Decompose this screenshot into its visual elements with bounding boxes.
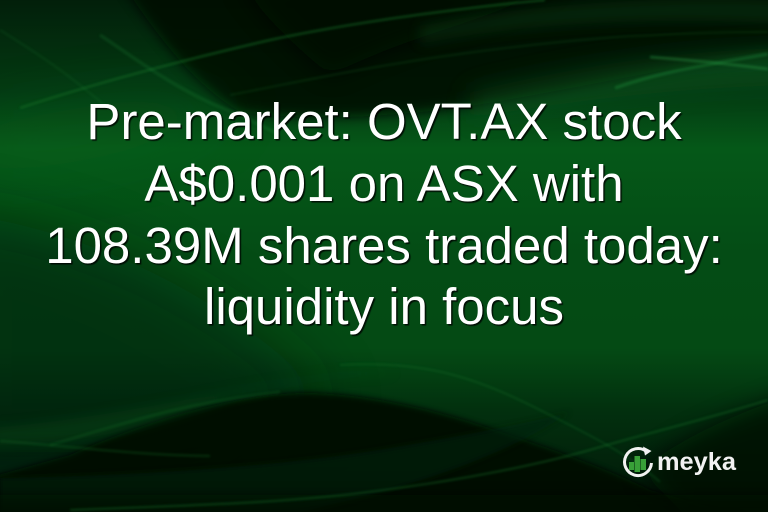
logo: meyka [623, 446, 737, 478]
left lower darkening [0, 210, 330, 480]
left light glow [0, 97, 240, 175]
bottom dark mound [0, 393, 768, 512]
top dark swoosh [120, 0, 768, 117]
bottom glows and streaks [0, 372, 400, 445]
streaks [0, 0, 768, 135]
title: 108.39M shares traded today: [45, 217, 723, 274]
icon: ring with bars [625, 446, 652, 476]
title: Pre-market: OVT.AX stock [86, 93, 682, 150]
wordmark: meyka [657, 448, 737, 476]
top-right glow band [420, 0, 768, 44]
title: A$0.001 on ASX with [144, 155, 624, 212]
title: liquidity in focus [204, 278, 564, 335]
